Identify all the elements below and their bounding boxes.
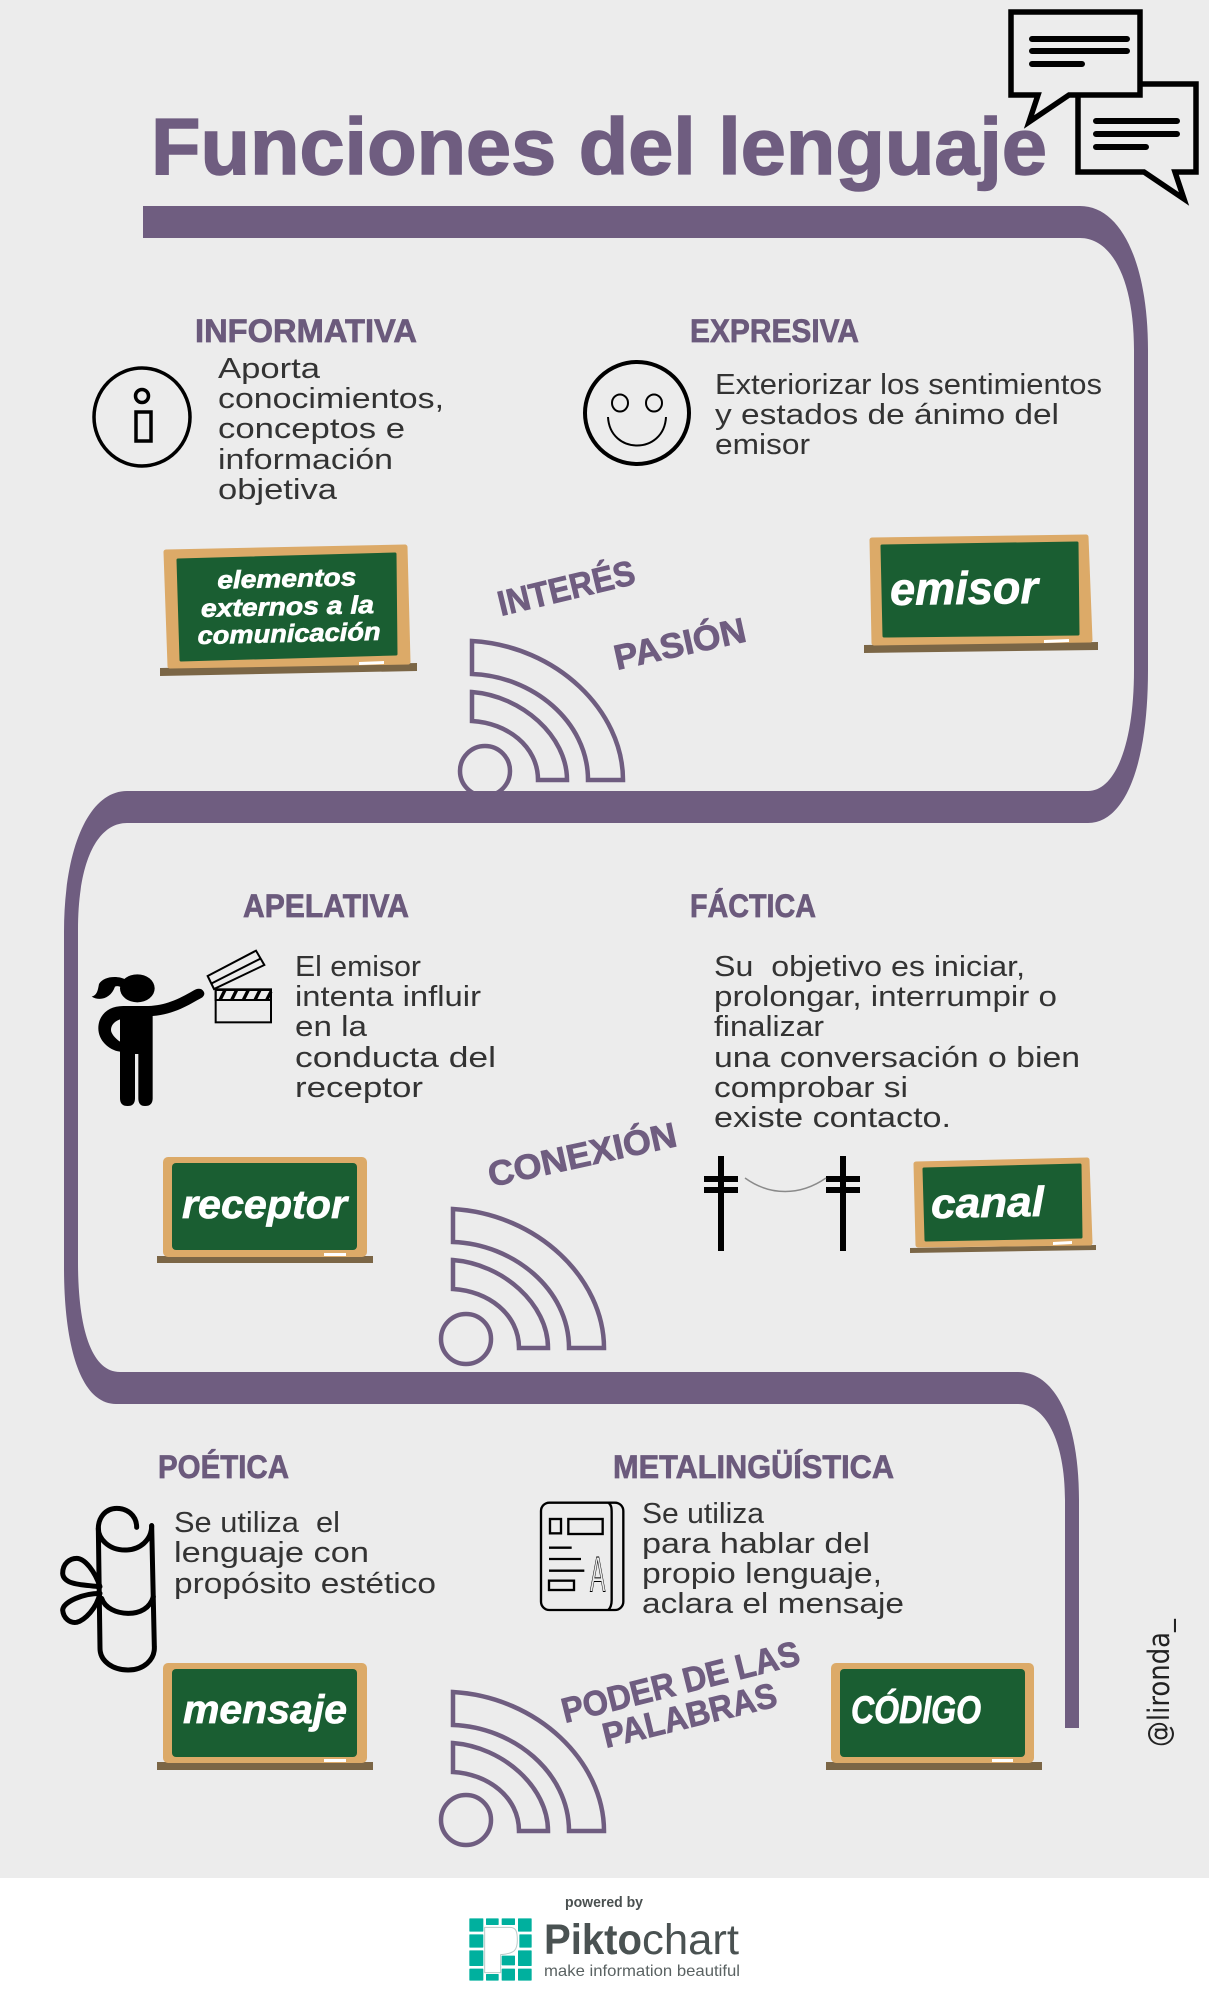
icon: scroll with bow — [63, 1508, 154, 1670]
chalkboard: código: CÓDIGO — [851, 1688, 981, 1732]
icon: signal waves 2 — [441, 1209, 604, 1364]
chalkboard: canal: canal — [930, 1178, 1046, 1227]
icon: signal waves 3 — [441, 1692, 604, 1845]
label: poder de las palabras: PALABRAS — [599, 1676, 781, 1756]
text: apelativa description: receptor — [295, 1072, 423, 1104]
heading: expresiva: EXPRESIVA — [690, 313, 859, 349]
text: fáctica description: Su objetivo es iniciar, — [714, 951, 1025, 983]
chalkboard: receptor: receptor — [182, 1183, 350, 1227]
text: metalingüística description: Se utiliza — [642, 1498, 765, 1530]
text: poética description: propósito estético — [174, 1568, 436, 1600]
footer: powered by Piktochart — [469, 1894, 740, 1981]
icon: telephone poles — [704, 1156, 860, 1251]
icon: person with clapperboard — [92, 951, 271, 1106]
label: conexión: CONEXIÓN — [484, 1115, 680, 1195]
text: poética description: lenguaje con — [174, 1537, 369, 1569]
text: metalingüística description: para hablar del — [642, 1528, 870, 1560]
text: poética description — [174, 1507, 436, 1600]
text: powered by: powered by — [565, 1894, 644, 1911]
text: poética description: Se utiliza el — [174, 1507, 340, 1539]
chalkboard: elementos externos a la comunicación — [160, 547, 417, 676]
heading: apelativa: APELATIVA — [243, 888, 409, 924]
text: informativa description: información — [218, 444, 393, 476]
text: fáctica description: prolongar, interrumpir o — [714, 981, 1057, 1013]
credit: author handle: @lironda_ — [1142, 1619, 1176, 1747]
logo: Piktochart tiles — [469, 1918, 532, 1981]
chalkboard: receptor — [157, 1157, 373, 1263]
panel: apelativa — [92, 888, 496, 1263]
text: metalingüística description: aclara el mensaje — [642, 1588, 904, 1620]
panel: informativa — [94, 313, 444, 676]
text: informativa description — [218, 353, 444, 506]
text: informativa description: conocimientos, — [218, 383, 444, 415]
text: fáctica description: comprobar si — [714, 1072, 908, 1104]
text: fáctica description: existe contacto. — [714, 1102, 951, 1134]
heading: metalingüística: METALINGÜÍSTICA — [613, 1449, 894, 1485]
icon: smiley — [585, 362, 689, 464]
heading: fáctica: FÁCTICA — [690, 888, 816, 924]
text: apelativa description: intenta influir — [295, 981, 481, 1013]
label: poder de las palabras: PODER DE LAS — [558, 1634, 804, 1731]
tagline: make information beautiful — [544, 1963, 740, 1980]
text: fáctica description: finalizar — [714, 1011, 824, 1043]
label: pasión: PASIÓN — [610, 610, 750, 678]
text: informativa description: conceptos e — [218, 413, 405, 445]
title: Funciones del lenguaje — [151, 102, 1047, 191]
text: expresiva description: emisor — [715, 429, 810, 461]
text: fáctica description: una conversación o bien — [714, 1042, 1080, 1074]
chalkboard: canal — [910, 1160, 1096, 1253]
wordmark: Piktochart: chart — [642, 1916, 739, 1964]
icon: speech bubbles — [1011, 12, 1196, 199]
text: metalingüística description: propio lenguaje, — [642, 1558, 882, 1590]
text: informativa description: Aporta — [218, 353, 321, 385]
heading: informativa: INFORMATIVA — [195, 313, 417, 349]
text: expresiva description — [715, 369, 1102, 461]
panel: fáctica — [690, 888, 1096, 1253]
text: fáctica description — [714, 951, 1080, 1134]
icon: document with letter A — [541, 1503, 623, 1610]
panel: expresiva — [585, 313, 1102, 653]
text: expresiva description: y estados de ánimo del — [715, 399, 1059, 431]
winding path ribbon — [64, 206, 1148, 1728]
chalkboard: código — [826, 1663, 1042, 1770]
chalkboard: emisor — [864, 537, 1098, 653]
text: informativa description: objetiva — [218, 474, 338, 506]
text: apelativa description: El emisor — [295, 951, 421, 983]
text: expresiva description: Exteriorizar los sentimientos — [715, 369, 1102, 401]
label: interés: INTERÉS — [494, 552, 639, 624]
icon: info circle — [94, 368, 190, 466]
text: metalingüística description — [642, 1498, 904, 1620]
chalkboard: mensaje — [157, 1663, 373, 1770]
wordmark: Piktochart: Pikto — [544, 1916, 642, 1964]
chalkboard: elementos externos a la comunicación: elementos — [217, 563, 357, 595]
text: apelativa description: en la — [295, 1011, 368, 1043]
icon: signal waves 1 — [460, 641, 623, 796]
chalkboard: elementos externos a la comunicación: comunicación — [197, 618, 381, 650]
chalkboard: mensaje: mensaje — [183, 1688, 347, 1732]
icon: document with letter A: A — [590, 1547, 606, 1603]
wordmark: Piktochart — [544, 1916, 739, 1964]
panel: poética — [63, 1449, 436, 1770]
chalkboard: emisor: emisor — [890, 561, 1040, 615]
panel: metalingüística — [541, 1449, 1042, 1770]
heading: poética: POÉTICA — [158, 1449, 289, 1485]
chalkboard: elementos externos a la comunicación: externos a la — [201, 591, 374, 623]
text: apelativa description: conducta del — [295, 1042, 496, 1074]
text: apelativa description — [295, 951, 496, 1104]
